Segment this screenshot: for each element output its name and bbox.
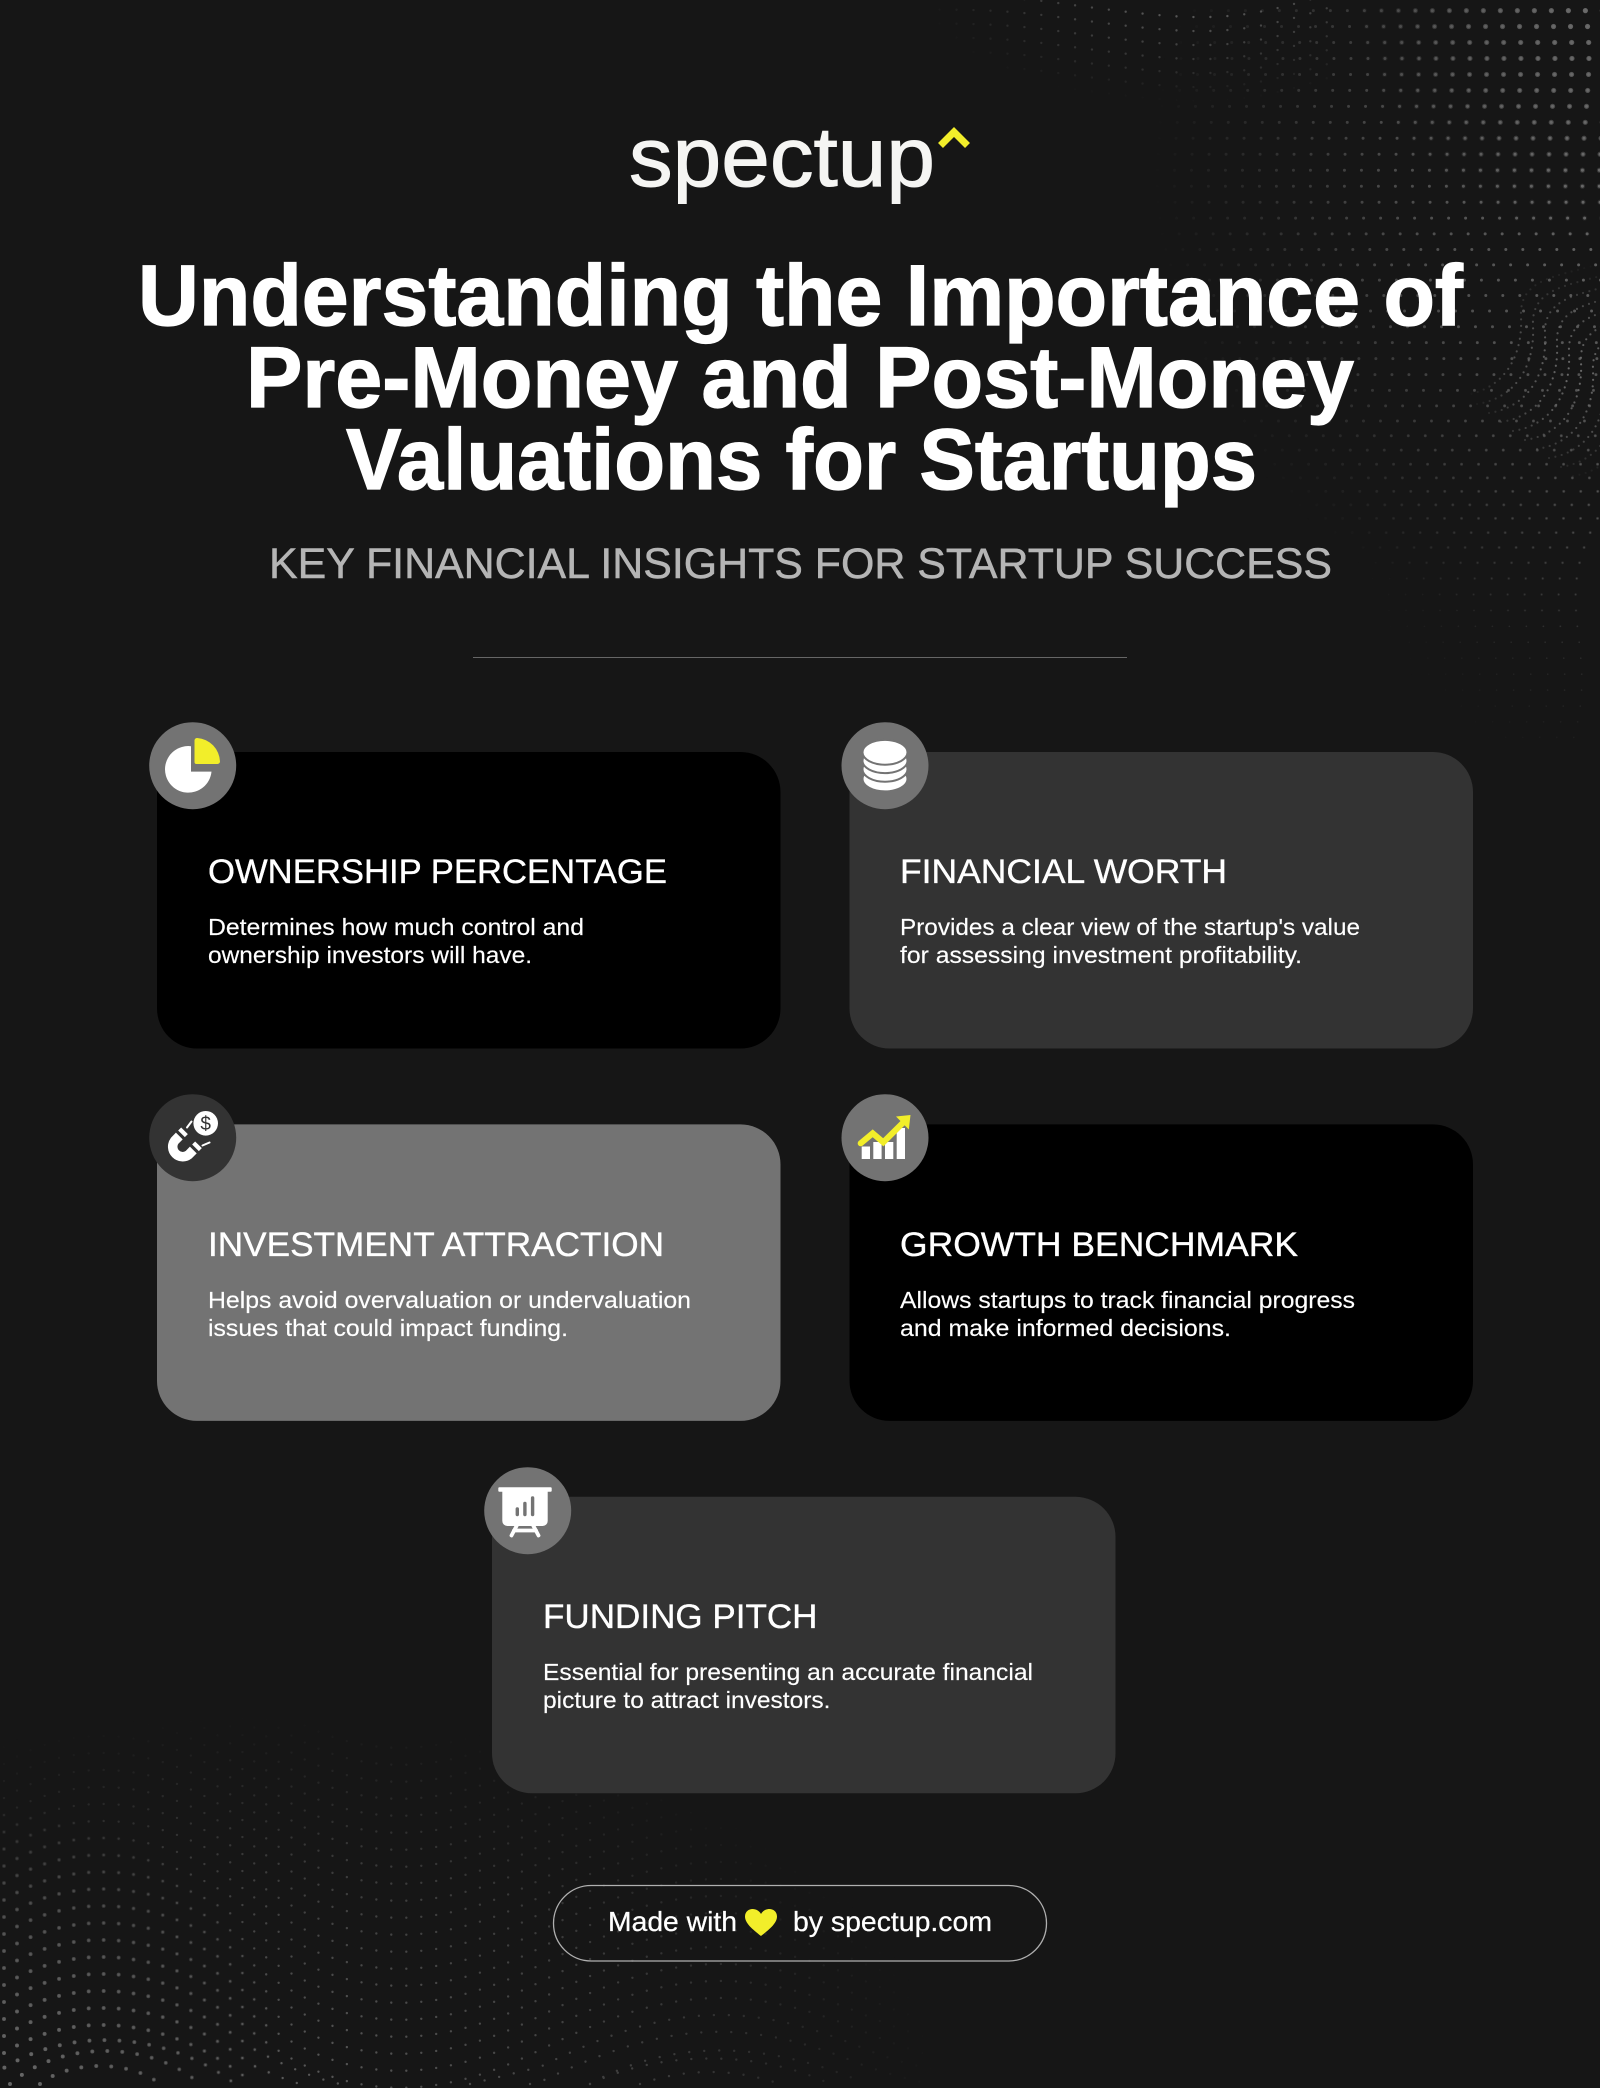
icon: magnet and dollar xyxy=(149,1094,236,1181)
icon: growth chart xyxy=(842,1094,928,1181)
title: Pre-Money and Post-Money xyxy=(246,330,1354,426)
panel: funding pitch xyxy=(484,1467,1116,1793)
description: issues that could impact funding. xyxy=(208,1315,568,1341)
panel: investment attraction xyxy=(149,1094,780,1421)
panel: ownership percentage xyxy=(149,722,780,1048)
icon: heart xyxy=(745,1909,777,1936)
heading: OWNERSHIP PERCENTAGE xyxy=(208,853,667,891)
icon: presentation board xyxy=(484,1467,571,1554)
title: Valuations for Startups xyxy=(346,412,1257,508)
panel: growth benchmark xyxy=(842,1094,1473,1421)
description: and make informed decisions. xyxy=(900,1315,1231,1341)
panel: financial worth xyxy=(842,722,1473,1048)
description: Helps avoid overvaluation or undervaluation xyxy=(208,1287,691,1313)
footer badge xyxy=(554,1886,1046,1961)
heading: GROWTH BENCHMARK xyxy=(900,1226,1298,1264)
description xyxy=(900,914,1360,968)
description: Allows startups to track financial progress xyxy=(900,1287,1355,1313)
icon: pie chart xyxy=(149,722,236,809)
icon: coin stack xyxy=(842,722,928,809)
title: Understanding the Importance of xyxy=(138,248,1463,344)
description: Provides a clear view of the startup's value xyxy=(900,914,1360,940)
description xyxy=(543,1659,1033,1713)
description: Essential for presenting an accurate financial xyxy=(543,1659,1033,1685)
description xyxy=(900,1287,1355,1341)
footer badge: Made with xyxy=(608,1906,737,1937)
heading: FUNDING PITCH xyxy=(543,1598,818,1636)
subtitle: KEY FINANCIAL INSIGHTS FOR STARTUP SUCCESS xyxy=(269,540,1332,588)
description: for assessing investment profitability. xyxy=(900,942,1302,968)
logo: spectup: spectup xyxy=(629,110,935,204)
description xyxy=(208,914,584,968)
icon: magnet and dollar: $ xyxy=(200,1114,211,1135)
heading: FINANCIAL WORTH xyxy=(900,853,1227,891)
title xyxy=(138,248,1463,508)
footer badge: by spectup.com xyxy=(793,1906,992,1937)
description xyxy=(208,1287,691,1341)
heading: INVESTMENT ATTRACTION xyxy=(208,1226,664,1264)
description: picture to attract investors. xyxy=(543,1687,830,1713)
description: Determines how much control and xyxy=(208,914,584,940)
description: ownership investors will have. xyxy=(208,942,532,968)
